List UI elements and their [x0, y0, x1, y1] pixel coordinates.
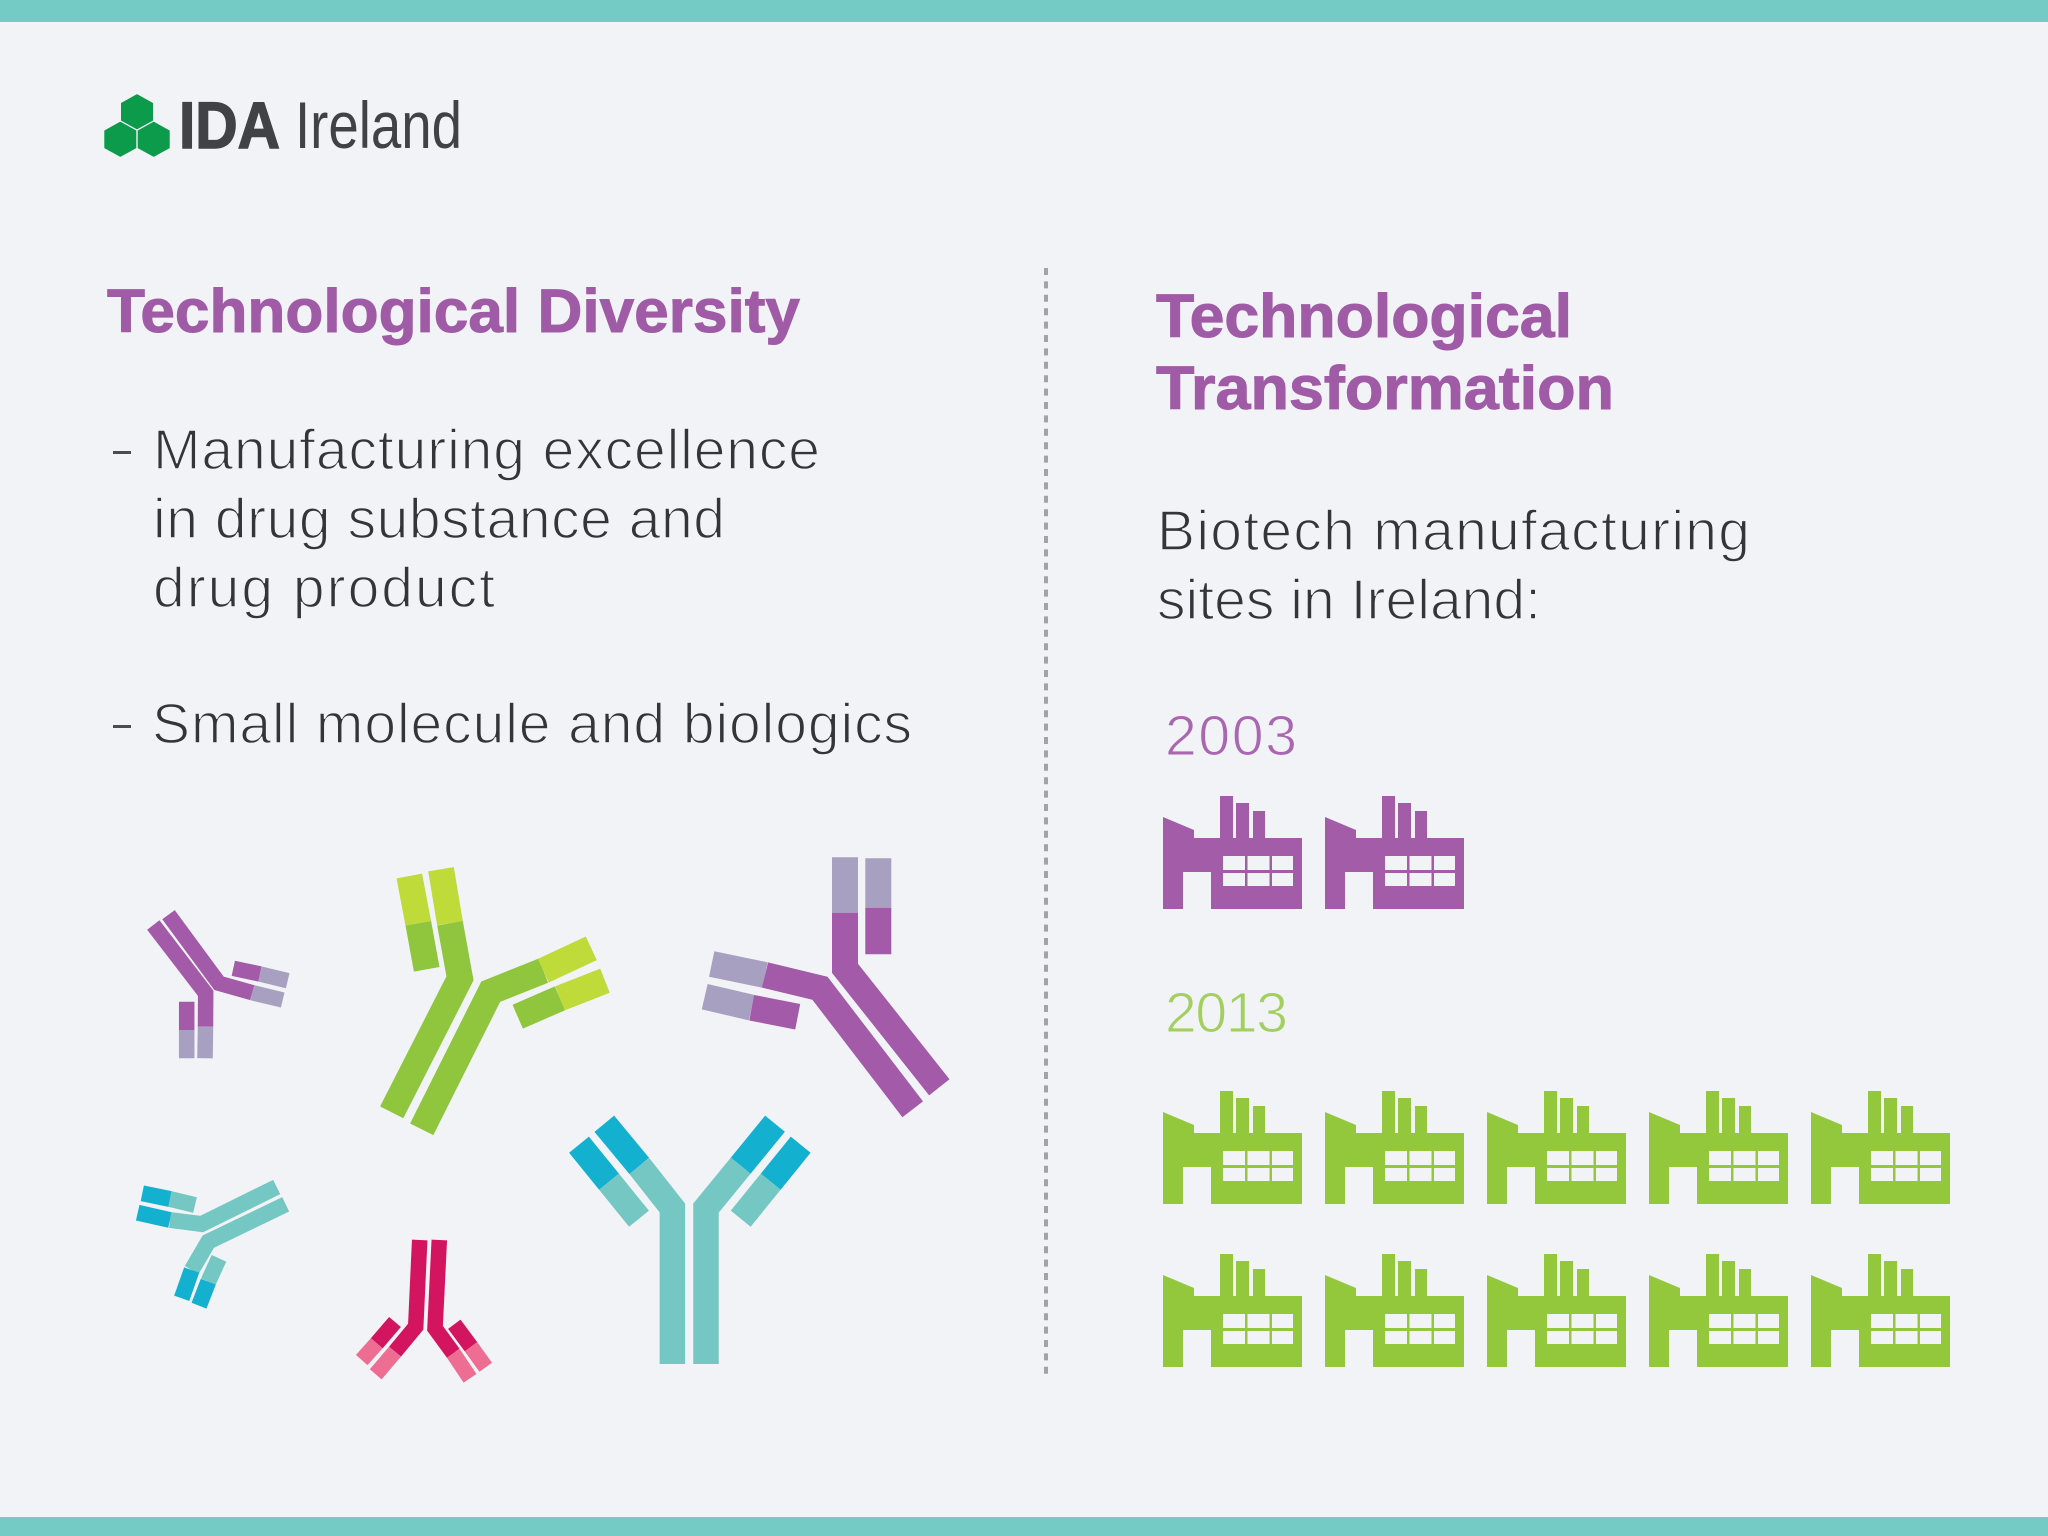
- logo: IDA Ireland: [105, 88, 462, 162]
- text block: biotech manufacturing sites: Biotech manufacturing: [1157, 499, 1750, 563]
- logo wordmark: IDA: [179, 88, 280, 162]
- text block: bullet list: [113, 418, 912, 756]
- icon: small purple antibody: [153, 915, 288, 1058]
- icon: factory: [1325, 796, 1464, 909]
- icon: crimson antibody: [362, 1240, 486, 1378]
- text block: bullet list: drug product: [153, 556, 495, 620]
- icon: large teal antibody: [579, 1124, 801, 1364]
- text block: bullet list: Small molecule and biologics: [152, 692, 912, 756]
- text block: biotech manufacturing sites: sites in Ireland:: [1157, 568, 1541, 632]
- heading: Technological Diversity: Technological Diversity: [107, 277, 800, 345]
- icon: factory: [1163, 796, 1302, 909]
- icon: small teal antibody: [138, 1187, 286, 1306]
- heading: Technological Transformation: [1156, 282, 1614, 422]
- logo wordmark: [179, 88, 462, 162]
- heading: Technological Transformation: Technological: [1156, 282, 1572, 350]
- text block: biotech manufacturing sites: [1157, 499, 1750, 632]
- icon: green antibody: [392, 869, 605, 1129]
- logo wordmark: Ireland: [295, 88, 462, 162]
- text block: bullet list: in drug substance and: [153, 487, 725, 551]
- icon: three green hexagons: [105, 95, 169, 156]
- dotted divider: [1044, 268, 1048, 1376]
- label: 2003: 2003: [1165, 704, 1297, 768]
- icon group: 2003 purple factories: [1163, 796, 1464, 909]
- label: 2013: 2013: [1165, 981, 1288, 1045]
- bottom band: [0, 1517, 2048, 1536]
- icon group: 2013 green factories: [1163, 1091, 1950, 1367]
- text block: bullet list: Manufacturing excellence: [153, 418, 820, 482]
- top band: [0, 0, 2048, 22]
- heading: Technological Transformation: Transformation: [1156, 354, 1614, 422]
- icon: large purple antibody: [705, 857, 939, 1109]
